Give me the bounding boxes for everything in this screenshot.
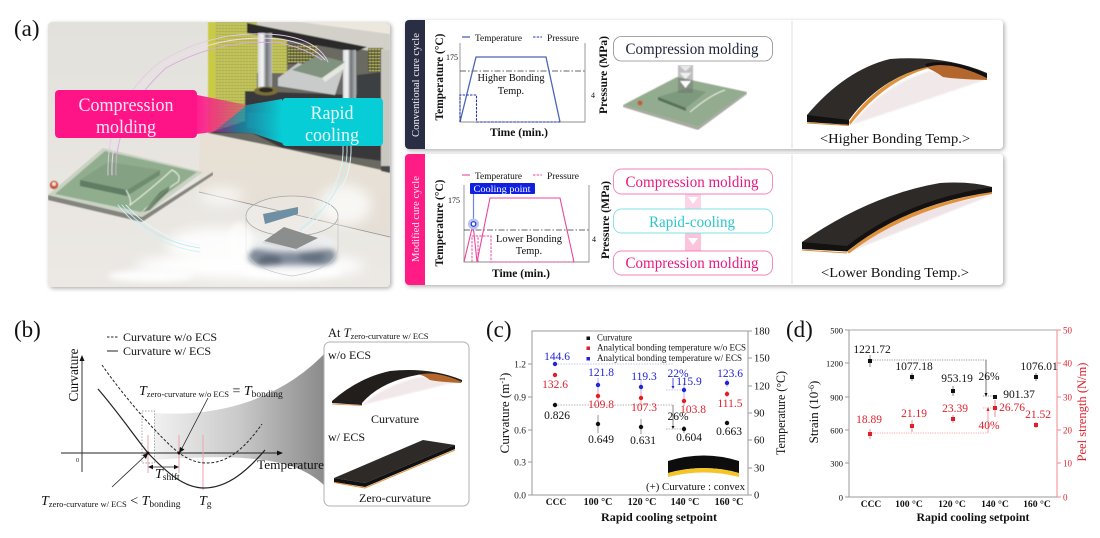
axes bbox=[61, 348, 324, 472]
value labels: peel strength: 21.52 bbox=[1025, 409, 1051, 421]
error bars bbox=[598, 378, 727, 434]
chart: modified cycle: Temp. bbox=[516, 246, 542, 257]
chart: modified cycle: Cooling point bbox=[474, 185, 531, 195]
callout: rapid cooling: cooling bbox=[305, 126, 359, 146]
callout: rapid cooling bbox=[282, 98, 383, 146]
label: zero-curvature: Zero-curvature bbox=[359, 491, 431, 505]
formula: zero curvature without ECS: T bbox=[139, 384, 148, 399]
value labels: strain bbox=[853, 344, 1058, 401]
inset box bbox=[324, 342, 469, 506]
legend: Analytical bonding temperature w/o ECS bbox=[597, 342, 746, 352]
reference lines bbox=[555, 364, 684, 429]
panel label (b): (b) bbox=[14, 317, 41, 342]
chart: conventional cycle: Higher Bonding bbox=[478, 73, 545, 84]
step: compression molding again: Compression molding bbox=[626, 255, 758, 272]
step: compression molding bbox=[614, 169, 772, 194]
value labels: strain: 953.19 bbox=[941, 373, 973, 385]
category labels: 160 °C bbox=[1023, 499, 1051, 510]
left axis: 0.6 bbox=[514, 426, 526, 436]
label: without ECS: w/o ECS bbox=[328, 348, 371, 362]
left axis bbox=[806, 326, 843, 502]
chart: conventional cycle: 4 bbox=[591, 91, 595, 100]
legend bbox=[107, 330, 217, 358]
left axis: -1 bbox=[498, 377, 507, 384]
left axis: 0.0 bbox=[514, 492, 526, 502]
value labels: curvature: 0.604 bbox=[676, 432, 702, 444]
chart: conventional cycle: 175 bbox=[446, 53, 458, 62]
category labels: 160 °C bbox=[715, 497, 743, 508]
step: compression molding: Compression molding bbox=[626, 174, 758, 191]
step: rapid-cooling bbox=[614, 209, 772, 233]
value labels: with ECS: 119.3 bbox=[631, 371, 657, 383]
category labels: Rapid cooling setpoint bbox=[916, 510, 1030, 524]
chart: modified cycle: 4 bbox=[592, 235, 596, 244]
value labels: curvature: 0.663 bbox=[716, 426, 742, 438]
axes: 0 bbox=[76, 458, 79, 464]
category labels: 120 °C bbox=[938, 499, 966, 510]
callout: compression molding: molding bbox=[96, 118, 156, 138]
curved process arrows bbox=[108, 34, 351, 252]
funnel zoom band bbox=[154, 353, 325, 486]
formula: zero curvature with ECS: bonding bbox=[149, 500, 181, 510]
legend: Curvature w/ ECS bbox=[123, 344, 211, 358]
step: rapid-cooling: Rapid-cooling bbox=[649, 214, 735, 231]
panel: curvature and bonding temperature chart bbox=[497, 326, 788, 524]
chart: modified cycle: Pressure (MPa) bbox=[598, 181, 612, 259]
right axis: 10 bbox=[1063, 458, 1072, 468]
value labels: without ECS: 111.5 bbox=[717, 398, 743, 410]
circuit board illustration bbox=[623, 65, 747, 130]
right axis: 50 bbox=[1063, 326, 1072, 336]
value labels: peel strength: 18.89 bbox=[856, 414, 882, 426]
panel label (c): (c) bbox=[486, 317, 512, 342]
category labels: 140 °C bbox=[981, 499, 1009, 510]
chart: conventional cycle: Pressure (MPa) bbox=[596, 36, 610, 114]
right axis: 30 bbox=[1063, 392, 1072, 402]
curve: with ECS bbox=[98, 389, 265, 488]
value labels: without ECS: 109.8 bbox=[588, 399, 614, 411]
value labels: peel strength: 40% bbox=[978, 420, 1000, 432]
tab: conventional cure cycle bbox=[405, 20, 425, 149]
left axis: 0.3 bbox=[514, 458, 526, 468]
value labels: strain: 1221.72 bbox=[853, 344, 891, 356]
formula: zero curvature without ECS: = bbox=[229, 384, 244, 399]
right axis: 20 bbox=[1063, 426, 1072, 436]
left axis: 0 bbox=[839, 492, 843, 502]
strip: flat bbox=[334, 440, 455, 488]
caption: lower bonding temp: <Lower Bonding Temp.> bbox=[821, 266, 969, 281]
chart: modified cycle bbox=[432, 171, 612, 280]
category labels: 120 °C bbox=[628, 497, 656, 508]
guide lines bbox=[148, 435, 203, 490]
heading: inset: At T bbox=[328, 326, 351, 340]
left axis: -6 bbox=[807, 385, 816, 392]
right axis: 0 bbox=[1063, 492, 1068, 502]
legend bbox=[586, 332, 746, 363]
axes: Curvature bbox=[66, 348, 81, 402]
right axis: 0 bbox=[754, 490, 759, 502]
chart: modified cycle: Temperature (°C) bbox=[432, 180, 446, 266]
chart: modified cycle: Time (min.) bbox=[492, 266, 550, 280]
right axis: Temperature (°C) bbox=[773, 371, 788, 455]
callout: compression molding: Compression bbox=[78, 96, 174, 116]
callout: rapid cooling: Rapid bbox=[310, 104, 354, 124]
tab: conventional cure cycle: Conventional cure cycle bbox=[410, 33, 422, 137]
value labels: strain: 26% bbox=[978, 371, 1000, 383]
strip: curved bbox=[332, 370, 462, 406]
right axis: 90 bbox=[754, 408, 764, 420]
left axis: ) bbox=[806, 381, 821, 385]
chart: modified cycle: 175 bbox=[448, 196, 460, 205]
curve: without ECS bbox=[102, 365, 262, 463]
panel label (d): (d) bbox=[786, 317, 813, 342]
right axis: 60 bbox=[754, 436, 764, 446]
reference lines bbox=[870, 360, 995, 433]
value labels: curvature: 0.826 bbox=[544, 410, 570, 422]
series: strain bbox=[868, 359, 1038, 399]
category labels: CCC bbox=[861, 500, 881, 510]
plot frame and ticks bbox=[845, 330, 1061, 497]
formula: zero curvature without ECS: zero-curvature w/o ECS bbox=[147, 389, 229, 399]
right axis: 40 bbox=[1063, 358, 1072, 368]
annotation arrows bbox=[112, 398, 208, 487]
floor line bbox=[199, 192, 390, 237]
value labels: without ECS: 132.6 bbox=[542, 379, 568, 391]
value labels: without ECS bbox=[542, 379, 743, 416]
series: curvature bbox=[553, 403, 729, 431]
right axis: 180 bbox=[754, 326, 770, 338]
error bars bbox=[870, 355, 1036, 439]
machine: compression press bbox=[199, 22, 390, 237]
icon: convex strip bbox=[668, 456, 739, 477]
formula: T shift: T bbox=[155, 467, 164, 482]
panel label (a): (a) bbox=[14, 16, 40, 41]
value labels: strain: 1077.18 bbox=[895, 361, 933, 373]
glass bowl with mist bbox=[108, 185, 371, 282]
chart: conventional cycle: Temp. bbox=[498, 86, 524, 97]
value labels: curvature: 0.649 bbox=[588, 434, 614, 446]
chart: conventional cycle: Time (min.) bbox=[490, 125, 548, 139]
formula: zero curvature with ECS: zero-curvature w/ ECS bbox=[49, 499, 127, 509]
strip: lower bonding temperature warpage bbox=[802, 182, 992, 254]
value labels: with ECS: 144.6 bbox=[544, 351, 570, 363]
value labels: with ECS bbox=[544, 351, 743, 388]
strip: higher bonding temperature warpage bbox=[807, 58, 987, 126]
left axis: Strain (10 bbox=[806, 392, 821, 443]
formula: zero curvature without ECS: T bbox=[244, 384, 253, 399]
chart: conventional cycle: Temperature bbox=[475, 33, 522, 43]
formula: T g: T bbox=[199, 494, 208, 509]
chart: conventional cycle bbox=[432, 33, 610, 139]
value labels: peel strength: 26.76 bbox=[999, 402, 1025, 414]
formula: zero curvature with ECS: < bbox=[127, 494, 142, 509]
callout: compression molding bbox=[55, 90, 197, 138]
panel: process illustration bbox=[48, 22, 390, 287]
series: with ECS bonding temperature bbox=[553, 362, 729, 392]
value labels: strain: 1076.01 bbox=[1020, 361, 1058, 373]
panel: strain and peel strength chart bbox=[806, 326, 1089, 524]
axes: Temperature bbox=[257, 458, 324, 472]
chart: modified cycle: Lower Bonding bbox=[496, 234, 563, 245]
category labels bbox=[546, 497, 743, 524]
left axis: 600 bbox=[830, 426, 843, 436]
formula: zero curvature without ECS: bonding bbox=[252, 390, 283, 400]
tab: modified cure cycle: Modified cure cycle bbox=[410, 176, 422, 262]
legend: Curvature bbox=[597, 332, 632, 342]
value labels: strain: 901.37 bbox=[1003, 389, 1035, 401]
formula: T shift: shift bbox=[163, 472, 180, 483]
chart: modified cycle: Temperature bbox=[475, 171, 522, 181]
plot frame and ticks bbox=[528, 331, 752, 495]
step: compression molding bbox=[614, 36, 772, 61]
category labels: 140 °C bbox=[671, 497, 699, 508]
panel: curvature versus temperature schematic bbox=[41, 326, 469, 510]
right axis bbox=[754, 326, 788, 502]
value labels: peel strength: 21.19 bbox=[901, 408, 927, 420]
right axis: Peel strength (N/m) bbox=[1074, 362, 1089, 462]
category labels: CCC bbox=[546, 498, 566, 508]
value labels: with ECS: 123.6 bbox=[717, 368, 743, 380]
left axis: 1.2 bbox=[514, 360, 526, 370]
right axis: 30 bbox=[754, 464, 764, 474]
step: compression molding again bbox=[614, 251, 772, 275]
category labels: Rapid cooling setpoint bbox=[601, 510, 717, 524]
circuit board left bbox=[48, 148, 213, 222]
panel: modified cure cycle bbox=[405, 154, 1003, 285]
tab: modified cure cycle bbox=[405, 154, 425, 285]
right axis: 120 bbox=[754, 382, 770, 392]
chart: conventional cycle: Pressure bbox=[547, 33, 579, 43]
series: without ECS bonding temperature bbox=[553, 373, 729, 403]
step: compression molding: Compression molding bbox=[626, 41, 758, 58]
chart: modified cycle: Pressure bbox=[547, 171, 579, 181]
process flow arrows bbox=[685, 194, 701, 251]
panel: conventional cure cycle bbox=[405, 20, 1003, 149]
value labels: with ECS: 22% bbox=[667, 368, 689, 380]
formula: zero curvature with ECS: T bbox=[142, 494, 151, 509]
left axis: ) bbox=[497, 373, 512, 377]
left axis: 300 bbox=[830, 458, 843, 468]
legend: Curvature w/o ECS bbox=[123, 330, 217, 344]
divider bbox=[791, 21, 793, 148]
formula: zero curvature with ECS: T bbox=[41, 494, 50, 509]
value labels: with ECS: 115.9 bbox=[676, 376, 702, 388]
legend: Analytical bonding temperature w/ ECS bbox=[597, 353, 742, 363]
left axis bbox=[497, 360, 526, 502]
chart: conventional cycle: Temperature (°C) bbox=[432, 34, 446, 120]
value labels: curvature: 26% bbox=[667, 411, 689, 423]
category labels: 100 °C bbox=[584, 497, 612, 508]
left axis: Curvature (m bbox=[497, 384, 512, 453]
divider bbox=[791, 155, 793, 284]
category labels: 100 °C bbox=[895, 499, 923, 510]
value labels: with ECS: 121.8 bbox=[588, 367, 614, 379]
caption: higher bonding temp: <Higher Bonding Temp.> bbox=[820, 132, 970, 147]
value labels: curvature: 0.631 bbox=[630, 435, 656, 447]
connector bands bbox=[197, 95, 282, 143]
left axis: 0.9 bbox=[514, 394, 526, 404]
category labels bbox=[861, 499, 1051, 524]
heading: inset: zero-curvature w/ ECS bbox=[351, 331, 429, 341]
note: convex: (+) Curvature : convex bbox=[646, 482, 746, 493]
label: with ECS: w/ ECS bbox=[328, 430, 365, 444]
label: curvature: Curvature bbox=[371, 412, 419, 426]
formula: T g: g bbox=[207, 500, 212, 510]
value labels: without ECS: 107.3 bbox=[631, 402, 657, 414]
value labels: curvature bbox=[544, 410, 742, 447]
right axis bbox=[1063, 326, 1089, 502]
left axis: 1200 bbox=[826, 358, 843, 368]
left axis: 500 bbox=[830, 326, 843, 336]
left axis: 900 bbox=[830, 392, 843, 402]
value labels: peel strength bbox=[856, 402, 1051, 432]
value labels: peel strength: 23.39 bbox=[942, 403, 968, 415]
value labels: without ECS: 103.8 bbox=[680, 404, 706, 416]
series: peel strength bbox=[868, 406, 1038, 436]
zoom window bbox=[142, 411, 154, 463]
right axis: 150 bbox=[754, 354, 770, 364]
